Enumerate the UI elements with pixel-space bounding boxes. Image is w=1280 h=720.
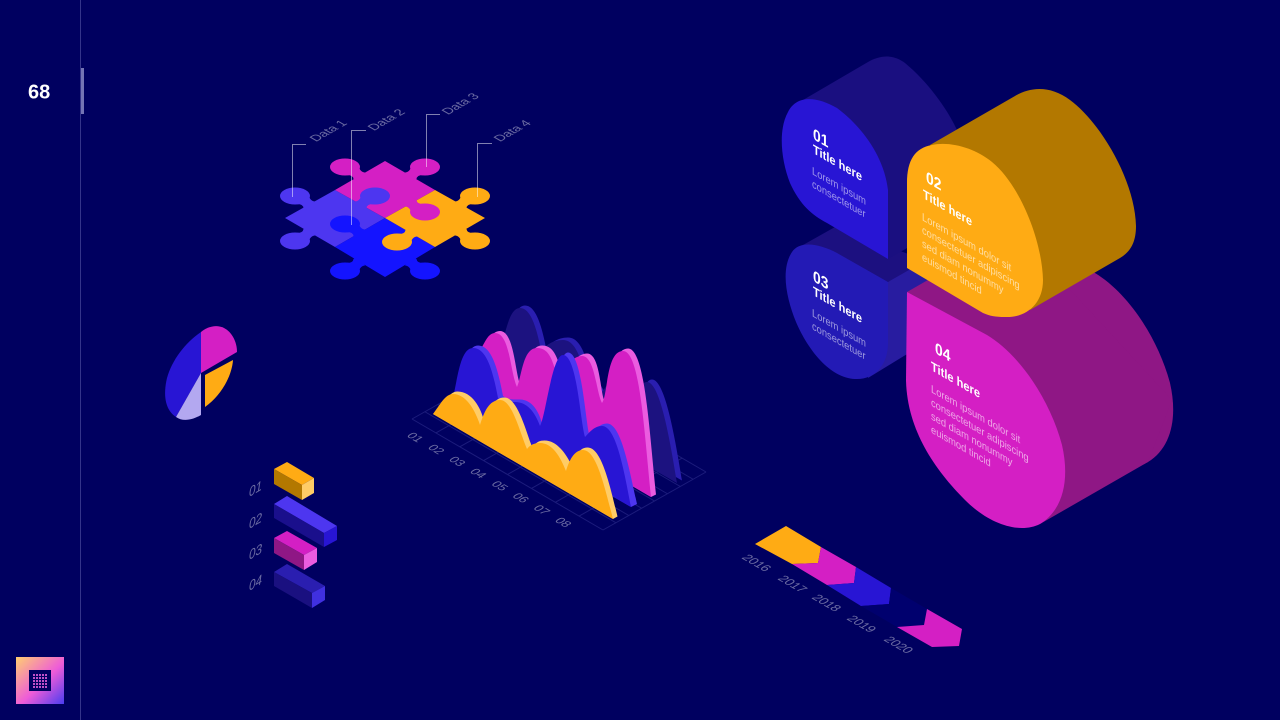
axis labels: 01 <box>403 430 427 444</box>
scroll indicator <box>81 68 84 114</box>
axis labels: 08 <box>551 515 575 529</box>
blue series <box>454 346 637 507</box>
segment 2019 <box>861 588 927 627</box>
card 04 text: Lorem ipsum dolor sit <box>931 383 1020 447</box>
isometric bar chart <box>249 462 337 608</box>
axis labels: 07 <box>530 503 554 517</box>
year labels: 2016 <box>738 552 775 573</box>
bar labels: 03 <box>249 540 262 563</box>
bar labels <box>249 477 262 594</box>
axis labels: 02 <box>424 442 448 456</box>
sidebar <box>28 0 84 720</box>
yellow lobes <box>382 188 490 250</box>
puzzle chart <box>280 91 535 280</box>
bar 01 <box>274 462 314 500</box>
page number: 68 <box>28 82 50 104</box>
card 02 <box>907 89 1136 317</box>
card 02 text: consectetuer adipiscing <box>922 224 1020 292</box>
card 04 text: sed diam nonummy <box>931 410 1013 469</box>
pie chart <box>165 326 237 420</box>
year labels: 2017 <box>774 573 811 594</box>
card 01 text: consectetuer <box>812 178 866 221</box>
axis labels: 06 <box>509 491 533 505</box>
data labels: Data 4 <box>490 118 535 144</box>
segment 2020 <box>897 609 962 647</box>
bar 02 <box>274 496 337 547</box>
axis labels: 04 <box>466 466 490 480</box>
segment 2017 <box>792 547 856 585</box>
bar labels: 01 <box>249 477 262 500</box>
segment 2016 <box>755 526 821 564</box>
year labels: 2020 <box>880 634 917 655</box>
bar labels: 02 <box>249 509 262 532</box>
card 03 text: consectetuer <box>812 320 866 363</box>
card 03 text: Lorem ipsum <box>812 307 866 350</box>
card 03 text <box>812 268 866 363</box>
card 03 text: 03 <box>813 268 828 294</box>
data labels <box>306 91 535 144</box>
year labels: 2018 <box>808 592 845 613</box>
card 04 text: Title here <box>931 358 980 401</box>
card 04 text <box>931 340 1029 470</box>
card 04 text: euismod tincid <box>931 423 991 470</box>
card 02 text: euismod tincid <box>922 251 982 297</box>
puzzle piece: data 3 <box>335 161 435 218</box>
card 01 text: 01 <box>813 126 828 152</box>
magenta lobes <box>330 158 440 220</box>
card 04 text: 04 <box>935 340 950 366</box>
year labels: 2019 <box>843 613 880 634</box>
data labels: Data 2 <box>364 107 409 133</box>
year labels <box>738 552 917 655</box>
card 02 text: Title here <box>923 186 972 229</box>
bar labels: 04 <box>249 571 262 594</box>
card 01 <box>782 56 963 259</box>
leader lines <box>292 114 492 225</box>
back series <box>505 306 682 483</box>
bar 04 <box>274 564 325 608</box>
timeline <box>738 526 962 655</box>
card 03 <box>786 227 930 379</box>
card 02 text: 02 <box>926 169 941 195</box>
card 04 text: consectetuer adipiscing <box>931 396 1029 465</box>
card 01 text: Lorem ipsum <box>812 165 866 208</box>
axis labels: 03 <box>445 454 469 468</box>
yellow series <box>433 392 618 519</box>
puzzle piece: data 4 <box>385 190 485 247</box>
purple lobes <box>280 188 390 250</box>
card 01 text <box>812 126 866 221</box>
logo icon <box>16 657 64 704</box>
bar 03 <box>274 531 317 570</box>
card 02 text: Lorem ipsum dolor sit <box>922 211 1011 275</box>
puzzle piece: data 1 <box>285 190 385 247</box>
data labels: Data 3 <box>438 91 483 117</box>
blue lobes <box>330 216 440 280</box>
puzzle piece: data 2 <box>335 218 435 277</box>
axis labels: 05 <box>488 479 512 493</box>
card 02 text: sed diam nonummy <box>922 237 1004 297</box>
data labels: Data 1 <box>306 118 351 144</box>
card 01 text: Title here <box>813 141 862 184</box>
card 04 <box>906 230 1173 528</box>
card 02 text <box>922 169 1020 297</box>
area chart <box>403 306 706 530</box>
axis labels <box>403 430 575 529</box>
card 03 text: Title here <box>813 283 862 326</box>
magenta series <box>482 331 656 497</box>
segment 2018 <box>827 567 891 606</box>
